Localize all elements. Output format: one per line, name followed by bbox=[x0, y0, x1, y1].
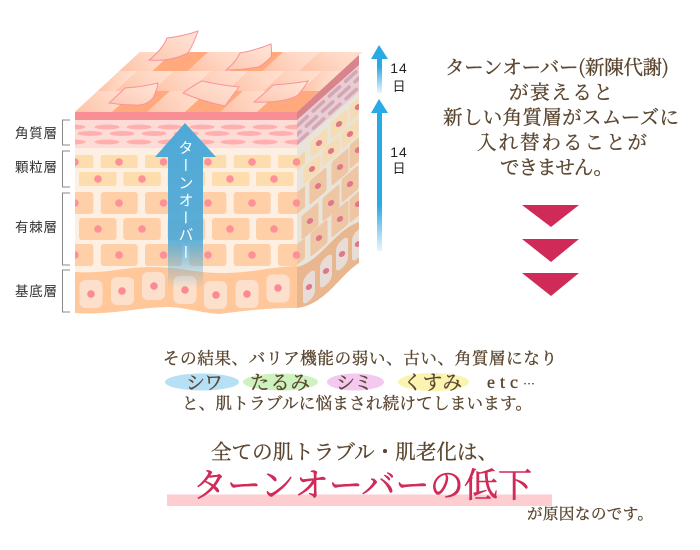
tag: シワ bbox=[165, 373, 239, 394]
stratum granulosum cells bbox=[75, 155, 297, 186]
explanation text: ターンオーバー(新陳代謝) bbox=[445, 52, 669, 80]
result text line: その結果、バリア機能の弱い、古い、角質層になり bbox=[163, 349, 557, 368]
label: stratum basale: 基底層 bbox=[15, 283, 57, 299]
explanation text bbox=[443, 52, 679, 179]
14-day arrow lower: 14 bbox=[390, 144, 408, 160]
top surface of skin bbox=[75, 52, 362, 112]
label: stratum spinosum: 有棘層 bbox=[15, 220, 57, 235]
14-day arrow upper: 14 bbox=[390, 60, 408, 76]
label: stratum basale bbox=[15, 270, 70, 312]
14-day arrow lower bbox=[371, 99, 408, 251]
highlight bar bbox=[167, 494, 552, 506]
label: stratum corneum bbox=[15, 120, 70, 145]
14-day arrow lower: 日 bbox=[392, 161, 406, 176]
skin problems row bbox=[165, 372, 535, 394]
layer labels bbox=[15, 120, 70, 312]
skin cross-section diagram bbox=[56, 31, 367, 315]
stratum basale bbox=[75, 266, 297, 314]
label: stratum corneum: 角質層 bbox=[15, 126, 57, 141]
key message: ターンオーバーの低下 bbox=[193, 468, 532, 505]
explanation text: できません。 bbox=[500, 158, 613, 179]
label: stratum granulosum bbox=[15, 151, 70, 187]
peeling skin flakes bbox=[109, 31, 308, 106]
stratum corneum cells bbox=[75, 124, 297, 144]
label: stratum spinosum bbox=[15, 193, 70, 265]
turnover arrow bbox=[155, 123, 216, 288]
closing text: が原因なのです。 bbox=[527, 505, 653, 523]
14-day arrow upper bbox=[371, 45, 408, 94]
tag: シミ bbox=[327, 373, 384, 394]
front face of skin bbox=[75, 112, 300, 314]
explanation text: 入れ替わることが bbox=[477, 132, 647, 154]
lead-in statement: 全ての肌トラブル・肌老化は、 bbox=[211, 441, 498, 464]
stratum spinosum cells bbox=[75, 192, 297, 266]
explanation text: 新しい角質層がスムーズに bbox=[443, 107, 679, 129]
turnover arrow: ターンオーバー bbox=[176, 140, 194, 262]
skin trouble sentence: と、肌トラブルに悩まされ続けてしまいます。 bbox=[182, 394, 532, 413]
explanation text: が衰えると bbox=[509, 82, 613, 104]
etc: etc … bbox=[487, 372, 535, 392]
tag: シミ: シミ bbox=[336, 373, 373, 394]
cell nuclei bbox=[71, 158, 300, 259]
tag: たるみ: たるみ bbox=[250, 373, 310, 394]
label: stratum granulosum: 顆粒層 bbox=[15, 160, 57, 175]
tag: シワ: シワ bbox=[186, 373, 223, 394]
14-day arrow upper: 日 bbox=[392, 79, 406, 94]
down arrows bbox=[522, 205, 579, 296]
side face of skin bbox=[297, 55, 359, 308]
tag: くすみ: くすみ bbox=[403, 373, 462, 394]
